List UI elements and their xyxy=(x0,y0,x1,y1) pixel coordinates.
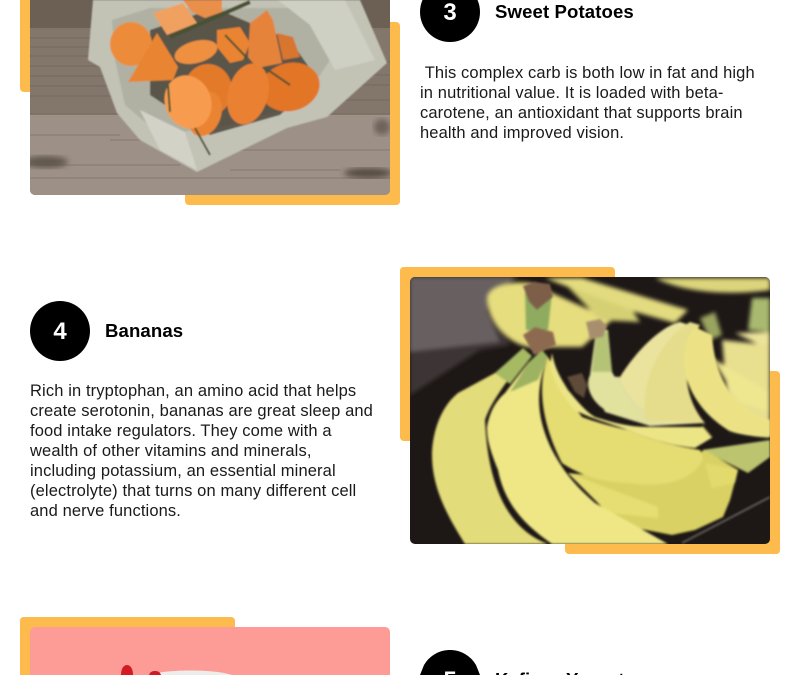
heading: Sweet Potatoes: Sweet Potatoes xyxy=(495,1,634,22)
heading: Bananas: Bananas xyxy=(105,320,183,341)
number badge 5 xyxy=(420,650,480,675)
text: bananas description: Rich in tryptophan, an amino acid that helps xyxy=(30,382,356,400)
photo: sweet potatoes on cloth xyxy=(30,0,390,195)
text: bananas description: (electrolyte) that turns on many different cell xyxy=(30,482,356,500)
panel: sweet potatoes image with frame xyxy=(20,0,400,205)
text: bananas description: food intake regulators. They come with a xyxy=(30,422,332,440)
text: bananas description: and nerve functions. xyxy=(30,502,181,520)
photo: bananas xyxy=(410,277,770,544)
panel: kefir yogurt image with frame xyxy=(20,617,390,675)
text: sweet potatoes description: carotene, an antioxidant that supports brain xyxy=(420,104,743,122)
text: bananas description: create serotonin, bananas are great sleep and xyxy=(30,402,373,420)
text: sweet potatoes description: in nutritional value. It is loaded with beta- xyxy=(420,84,724,102)
text: bananas description: wealth of other vitamins and minerals, xyxy=(30,442,312,460)
number badge 4: 4 xyxy=(53,318,67,345)
panel: bananas image with frame xyxy=(400,267,780,554)
text: bananas description: including potassium, an essential mineral xyxy=(30,462,336,480)
text: sweet potatoes description: This complex carb is both low in fat and high xyxy=(425,64,755,82)
photo: yogurt on pink background xyxy=(30,627,390,675)
text: bananas description xyxy=(30,382,373,520)
text: sweet potatoes description: health and improved vision. xyxy=(420,124,624,142)
number badge 4 xyxy=(30,301,90,361)
text: sweet potatoes description xyxy=(420,64,755,142)
